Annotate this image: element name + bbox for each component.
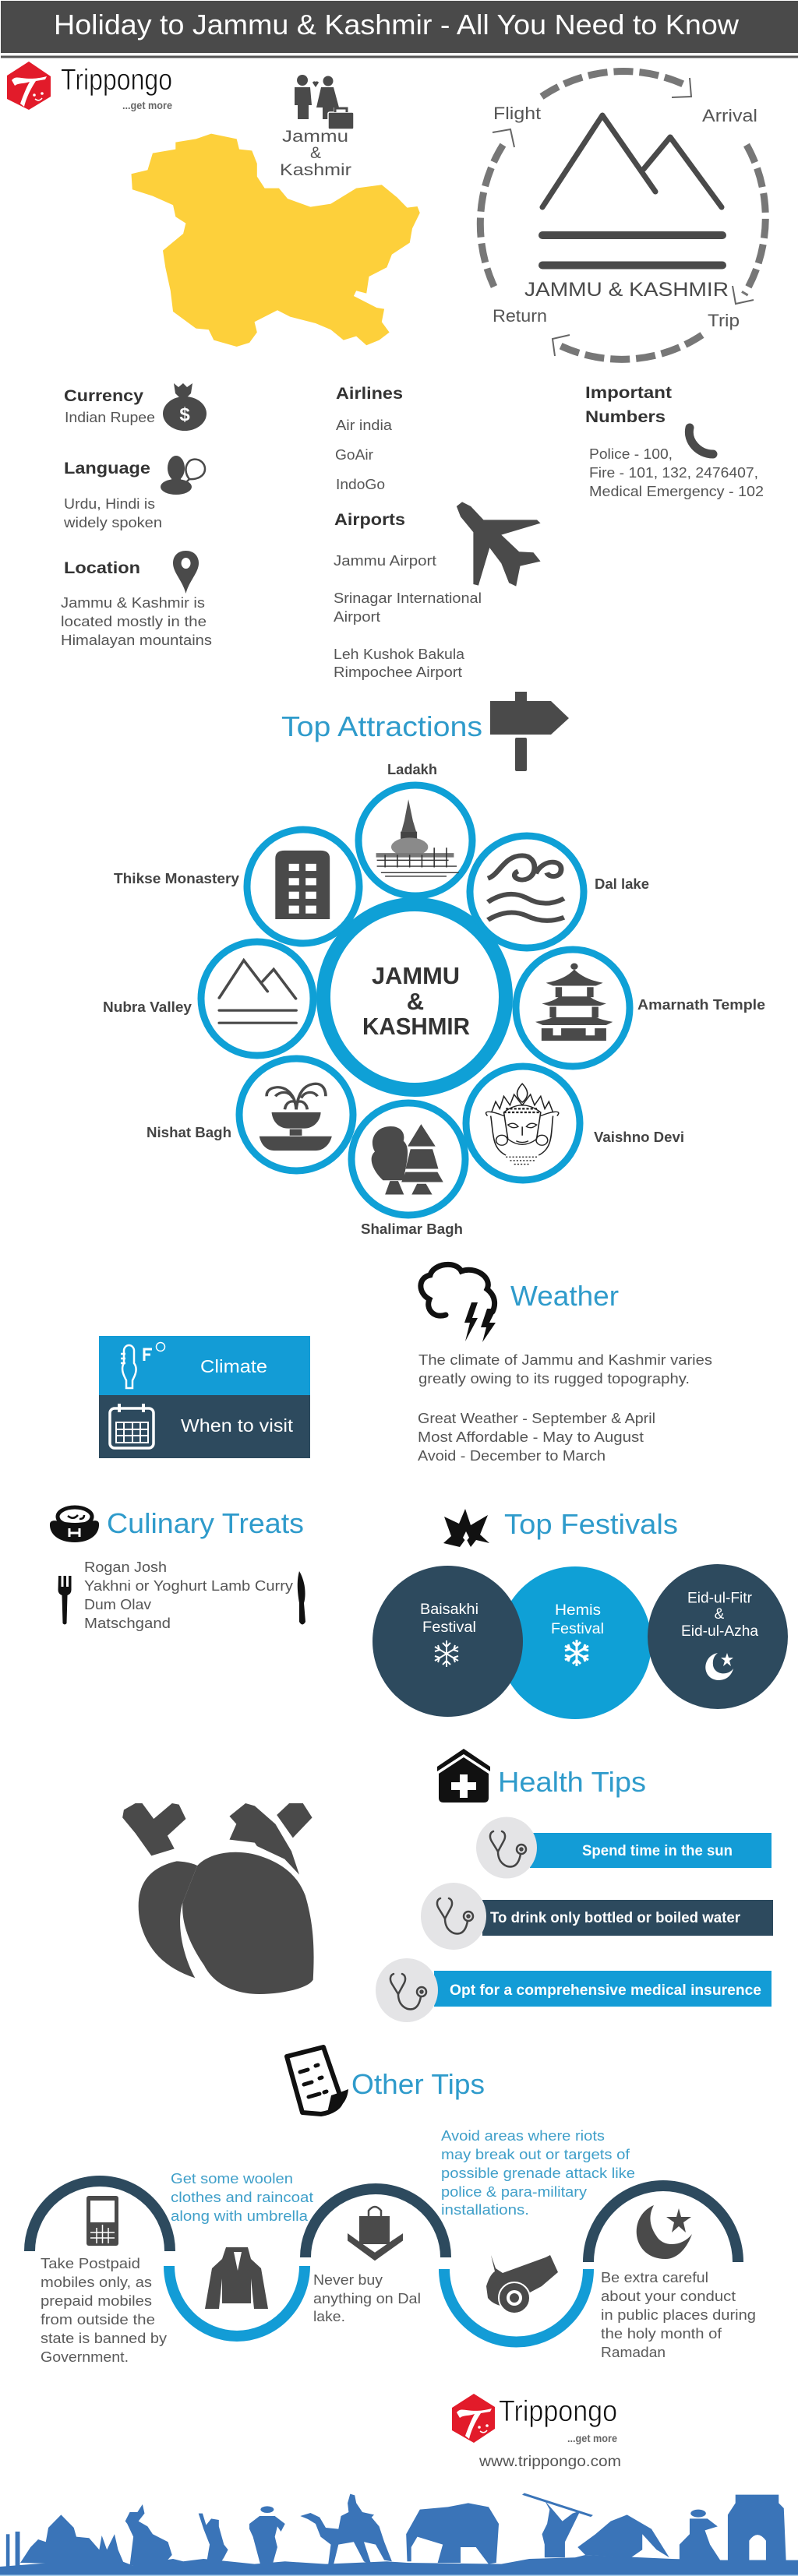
tent — [577, 2514, 669, 2557]
dancer two — [199, 2514, 228, 2565]
attraction labels: Dal lake — [595, 876, 649, 892]
festival: Eid: Eid-ul-Fitr — [687, 1591, 753, 1606]
tip: medical insurance: Opt for a comprehensive medical insurence — [450, 1982, 761, 1999]
icon: Thikse monastery building — [275, 851, 330, 919]
panel: airports — [334, 502, 541, 680]
tip: be careful during Ramadan: the holy month of — [601, 2326, 722, 2342]
attraction labels: Thikse Monastery — [114, 871, 239, 886]
hub centre: JAMMU — [372, 962, 460, 989]
panel: location — [61, 551, 212, 648]
icon: Ladakh stupa — [376, 799, 459, 876]
dashed cycle arcs — [480, 72, 765, 359]
title banner — [1, 1, 798, 58]
logo: Trippongo footer: ...get more — [567, 2432, 617, 2444]
tip: avoid riot areas: Avoid areas where riots — [441, 2128, 605, 2144]
attraction labels: Vaishno Devi — [594, 1129, 684, 1145]
panel: location: Location — [64, 559, 140, 577]
icon: thermometer — [121, 1343, 165, 1388]
panel: airports: Srinagar International — [334, 590, 482, 606]
tip: postpaid mobiles: Government. — [41, 2349, 129, 2365]
trip cycle with mountain emblem — [480, 72, 765, 359]
tip: avoid riot areas: police & para-military — [441, 2184, 587, 2200]
wave arcs — [30, 2181, 738, 2342]
panel: airports: Leh Kushok Bakula — [334, 647, 465, 662]
panel: airlines: Air india — [336, 418, 393, 433]
icon: snowflake — [435, 1640, 458, 1667]
logo: Trippongo top: Trippongo — [61, 64, 172, 97]
heading: top attractions: Top Attractions — [281, 710, 482, 742]
climate row: Climate — [200, 1356, 267, 1376]
dancer one — [125, 2504, 172, 2565]
panel: culinary treats: Yakhni or Yoghurt Lamb Curry — [84, 1578, 293, 1594]
icon: stethoscope — [490, 1831, 526, 1866]
panel: location: located mostly in the — [61, 614, 207, 629]
icon: food bowl — [50, 1507, 99, 1542]
icon: phone — [689, 428, 713, 454]
icon: Nubra Valley mountains — [219, 960, 296, 1023]
cycle arrowheads — [493, 78, 754, 356]
rings — [201, 785, 630, 1215]
icon: festival burst — [443, 1509, 489, 1547]
cycle labels: Trip — [708, 311, 740, 330]
panel: weather — [418, 1264, 712, 1464]
icon: stethoscope — [390, 1974, 426, 2009]
camel with rider — [300, 2494, 392, 2565]
panel: culinary treats: Rogan Josh — [84, 1559, 167, 1575]
attraction labels: Ladakh — [387, 762, 437, 777]
attraction labels: Amarnath Temple — [637, 997, 765, 1013]
festival: Eid: & — [715, 1606, 725, 1623]
attraction labels: Shalimar Bagh — [361, 1221, 463, 1237]
icon: money bag — [163, 383, 207, 431]
tip: avoid riot areas: installations. — [441, 2202, 529, 2218]
panel: location: Himalayan mountains — [61, 633, 212, 648]
tip: avoid riot areas: may break out or targets of — [441, 2147, 630, 2162]
panel: important numbers: Numbers — [585, 408, 666, 426]
festival: Baisakhi: Festival — [422, 1619, 476, 1636]
panel: health tips: Health Tips — [498, 1766, 646, 1798]
tip: avoid riot areas — [441, 2128, 635, 2218]
panel: important numbers: Fire - 101, 132, 2476407, — [589, 465, 758, 481]
dancer three — [249, 2506, 285, 2565]
tip: spend time in the sun — [476, 1817, 772, 1879]
panel: airports: Jammu Airport — [334, 553, 436, 569]
icon: fork — [58, 1576, 72, 1625]
icon: Nishat Bagh fountain — [260, 1084, 332, 1151]
panel: important numbers: Medical Emergency - 102 — [589, 484, 764, 499]
icon: Vaishno Devi face — [486, 1084, 559, 1165]
logo: Trippongo top: ...get more — [122, 99, 172, 111]
icon: map pin — [173, 551, 199, 594]
cycle labels: Flight — [493, 104, 541, 123]
tip: postpaid mobiles: mobiles only, as — [41, 2275, 152, 2290]
panel: weather: The climate of Jammu and Kashmir varies — [418, 1352, 712, 1368]
tip: be careful during Ramadan: about your conduct — [601, 2289, 736, 2304]
India Gate — [728, 2495, 786, 2568]
icon: money bag: $ — [179, 404, 190, 425]
tip: bottled water — [421, 1883, 773, 1950]
icon: signpost — [490, 692, 569, 771]
panel: airlines — [335, 385, 403, 492]
seated figure — [680, 2510, 720, 2560]
icon: checklist scroll — [287, 2047, 348, 2114]
tip: be careful during Ramadan: Be extra careful — [601, 2270, 708, 2285]
trip cycle with mountain emblem: JAMMU & KASHMIR — [524, 279, 729, 301]
mountain emblem — [542, 115, 722, 265]
hub centre — [323, 904, 506, 1090]
panel: weather: Weather — [510, 1280, 619, 1312]
elephant — [406, 2503, 499, 2564]
tip: avoid riot areas: possible grenade attack like — [441, 2165, 635, 2181]
panel: weather: Most Affordable - May to August — [418, 1429, 644, 1445]
icon: knife — [298, 1571, 305, 1625]
attraction labels: Nubra Valley — [103, 999, 192, 1015]
chart: wave of tips — [30, 2128, 756, 2365]
website address: www.trippongo.com — [478, 2454, 621, 2470]
when to visit row: When to visit — [181, 1415, 294, 1436]
chart: attractions hub — [103, 762, 765, 1237]
tip: postpaid mobiles: Take Postpaid — [41, 2256, 140, 2271]
panel: culinary treats: Matschgand — [84, 1616, 171, 1631]
tip: never buy on Dal lake: anything on Dal — [313, 2291, 421, 2306]
Taj Mahal — [6, 2514, 125, 2576]
tip: never buy on Dal lake: lake. — [313, 2309, 345, 2324]
tip: postpaid mobiles: state is banned by — [41, 2331, 167, 2346]
logo: Trippongo footer: Trippongo — [499, 2395, 617, 2428]
icon: Amarnath temple pagoda — [535, 964, 613, 1041]
panel: important numbers — [585, 384, 764, 499]
icon: speaking head — [161, 456, 205, 495]
tip: postpaid mobiles: from outside the — [41, 2312, 155, 2328]
attraction labels — [103, 762, 765, 1237]
panel: airlines: GoAir — [335, 447, 373, 463]
festival: Hemis: Hemis — [555, 1602, 601, 1619]
icon: airplane — [457, 502, 541, 587]
panel: top festivals — [373, 1508, 788, 1719]
icon: heart illustration — [122, 1803, 314, 1994]
panel: weather: greatly owing to its rugged topography. — [418, 1371, 690, 1387]
panel: weather: Great Weather - September & April — [418, 1411, 655, 1426]
hub centre: & — [407, 988, 424, 1015]
tip: never buy on Dal lake — [313, 2272, 421, 2324]
tip: postpaid mobiles: prepaid mobiles — [41, 2293, 152, 2309]
heading: other tips — [287, 2047, 485, 2114]
hub icons — [219, 799, 613, 1195]
icon: crescent and star — [705, 1653, 733, 1680]
hub centre: KASHMIR — [362, 1013, 470, 1040]
tip: woolen clothes — [171, 2171, 313, 2224]
panel: important numbers: Police - 100, — [589, 446, 673, 462]
map label — [280, 128, 351, 179]
tip: bottled water: To drink only bottled or boiled water — [490, 1910, 741, 1926]
panel: culinary treats: Culinary Treats — [107, 1507, 304, 1539]
festival: Hemis — [499, 1566, 651, 1719]
attraction labels: Nishat Bagh — [147, 1125, 231, 1140]
logo: Trippongo footer — [452, 2394, 617, 2444]
panel: health tips — [376, 1749, 773, 2022]
festival: Eid: Eid-ul-Azha — [681, 1623, 758, 1640]
logo: Trippongo top — [7, 62, 172, 111]
panel: airlines: Airlines — [336, 385, 403, 403]
panel: currency: Currency — [64, 387, 143, 405]
map label: Kashmir — [280, 161, 351, 179]
festival: Baisakhi: Baisakhi — [420, 1602, 478, 1618]
panel: top festivals: Top Festivals — [504, 1508, 678, 1540]
tip: woolen clothes: Get some woolen — [171, 2171, 293, 2187]
cycle labels: Arrival — [702, 106, 757, 125]
cycle labels — [493, 104, 757, 330]
icon: storm cloud — [421, 1264, 496, 1342]
tip: be careful during Ramadan — [601, 2270, 756, 2360]
ground band — [0, 2555, 798, 2576]
panel: language — [63, 456, 205, 530]
panel: airlines: IndoGo — [336, 477, 385, 492]
when to visit row — [99, 1395, 310, 1458]
panel: culinary treats — [50, 1507, 305, 1631]
icon: jacket — [205, 2247, 268, 2309]
map label: & — [310, 144, 321, 162]
festival: Eid — [648, 1564, 788, 1709]
tip: be careful during Ramadan: in public places during — [601, 2307, 756, 2323]
map: Jammu and Kashmir in yellow — [131, 134, 420, 347]
heading: top attractions — [281, 692, 569, 771]
icon: mobile phone — [87, 2196, 118, 2246]
panel: important numbers: Important — [585, 384, 672, 402]
tip: be careful during Ramadan: Ramadan — [601, 2345, 666, 2360]
skyline silhouette — [0, 2494, 798, 2576]
panel: weather: Avoid - December to March — [418, 1448, 606, 1464]
panel: location: Jammu & Kashmir is — [61, 595, 205, 611]
icon: Shalimar Bagh trees — [372, 1124, 443, 1195]
climate row — [99, 1336, 310, 1395]
panel: language: widely spoken — [63, 515, 162, 530]
icon: couple with suitcase — [295, 75, 354, 129]
icon: clinic house — [437, 1749, 490, 1802]
cycle labels: Return — [493, 306, 547, 326]
panel: language: Urdu, Hindi is — [64, 496, 155, 512]
tip: woolen clothes: clothes and raincoat — [171, 2190, 313, 2205]
panel: airports: Airport — [334, 609, 380, 625]
icon: Dal lake waves — [488, 855, 564, 921]
panel: climate and when to visit — [99, 1336, 310, 1458]
icon: snowflake — [565, 1640, 588, 1666]
tip: medical insurance — [376, 1958, 772, 2022]
icon: crescent and star — [637, 2205, 692, 2259]
tip: woolen clothes: along with umbrella — [171, 2208, 309, 2224]
title banner: Holiday to Jammu & Kashmir - All You Need to Know — [54, 9, 740, 41]
icon: calendar — [110, 1404, 154, 1448]
icon: cannon — [486, 2255, 558, 2313]
festival: Baisakhi — [373, 1566, 523, 1717]
panel: airports: Rimpochee Airport — [334, 664, 462, 680]
icon: shopping bag — [348, 2207, 402, 2260]
panel: currency — [64, 383, 207, 431]
warrior — [523, 2494, 592, 2557]
panel: culinary treats: Dum Olav — [84, 1597, 151, 1612]
heading: other tips: Other Tips — [351, 2068, 485, 2100]
panel: currency: Indian Rupee — [65, 410, 155, 425]
tip: spend time in the sun: Spend time in the sun — [582, 1843, 733, 1859]
tip: postpaid mobiles — [41, 2256, 167, 2365]
festival: Hemis: Festival — [551, 1621, 604, 1637]
tip: never buy on Dal lake: Never buy — [313, 2272, 383, 2288]
panel: airports: Airports — [334, 511, 405, 529]
panel: language: Language — [64, 460, 150, 477]
icon: stethoscope — [437, 1898, 473, 1933]
map label: Jammu — [282, 128, 348, 146]
